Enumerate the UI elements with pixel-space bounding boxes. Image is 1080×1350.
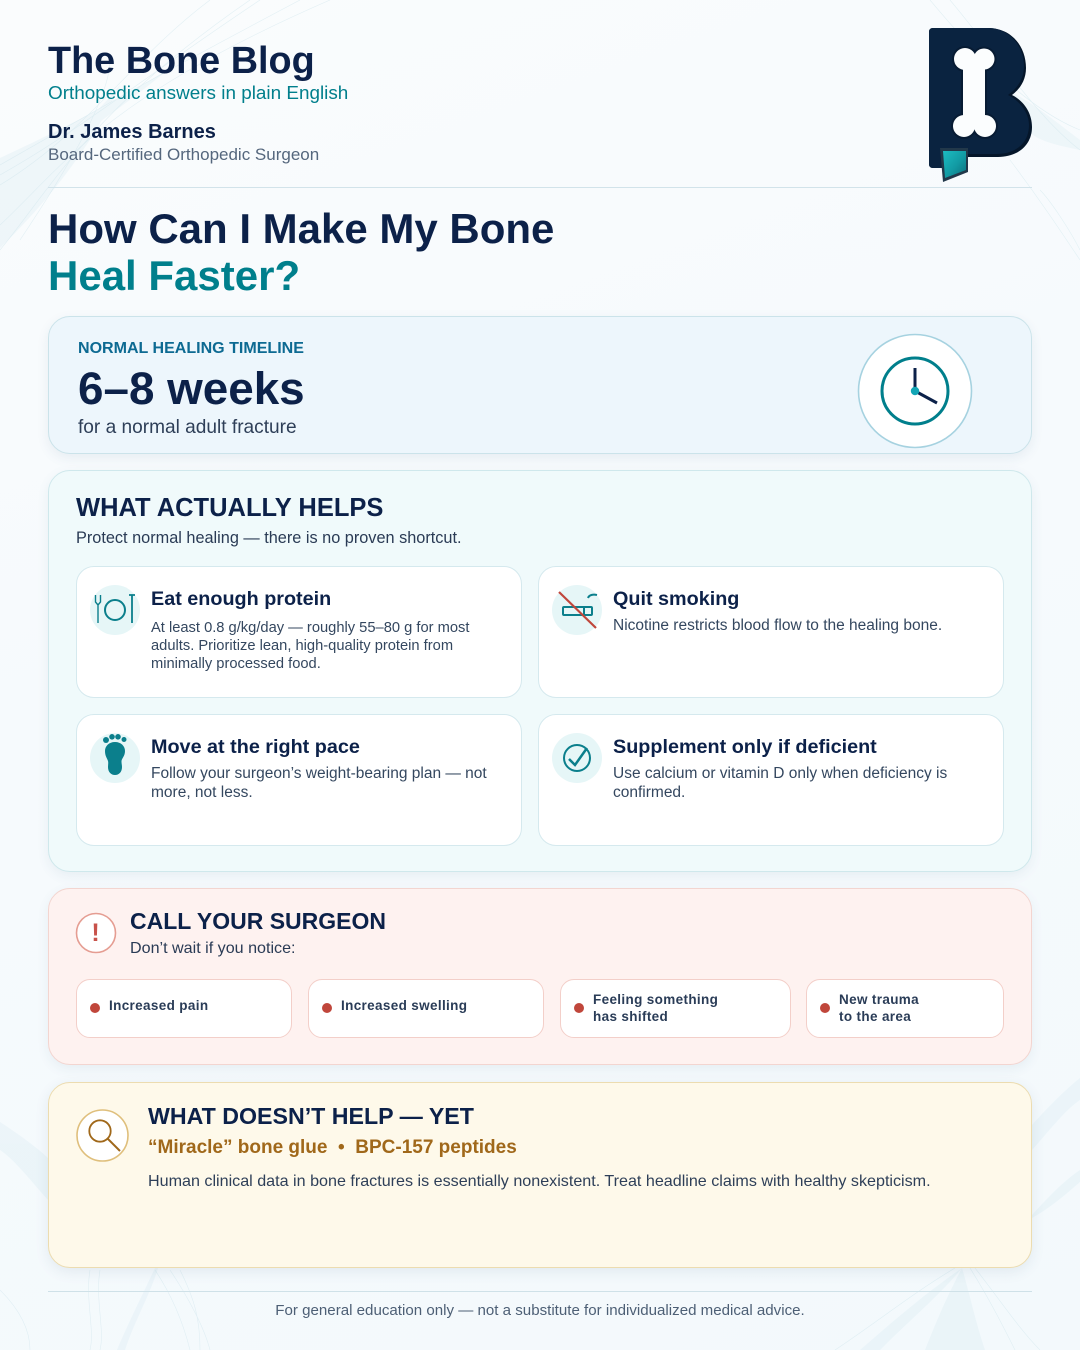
warning sign: increased pain: Increased pain [109,998,208,1013]
icon: plate and cutlery [90,585,140,635]
icon: clock [858,334,972,448]
icon: magnifying glass [76,1109,129,1162]
panel: call your surgeon [48,888,1032,1065]
card text [613,765,947,801]
panel: normal healing timeline [48,316,1032,454]
card text: more, not less. [151,784,253,801]
card text [151,620,470,672]
warning sign: feeling shift: has shifted [593,1009,668,1024]
icon: warning [76,912,116,954]
author name: Dr. James Barnes [48,121,216,143]
warning sign: new trauma [806,979,1004,1038]
card text: confirmed. [613,784,685,801]
card title: Quit smoking [613,588,739,610]
warning sign: feeling shift [560,979,791,1038]
warning sign: feeling shift: Feeling something [593,992,718,1007]
author credential: Board-Certified Orthopedic Surgeon [48,145,319,164]
card text: Follow your surgeon’s weight-bearing plan — not [151,765,487,782]
claims: “Miracle” bone glue • BPC-157 peptides [148,1137,517,1158]
timeline label: NORMAL HEALING TIMELINE [78,339,304,357]
card text: Use calcium or vitamin D only when deficiency is [613,765,947,782]
main heading: Heal Faster? [48,252,300,299]
warning sign: increased pain [76,979,292,1038]
icon: check circle [552,733,602,783]
timeline note: for a normal adult fracture [78,417,297,438]
footer divider [48,1291,1032,1292]
warning sign: increased swelling [308,979,544,1038]
icon: footprint [90,733,140,783]
panel: what actually helps [48,470,1032,872]
panel: what doesn't help yet [48,1082,1032,1268]
card: move [76,714,522,846]
card: protein [76,566,522,698]
card text: At least 0.8 g/kg/day — roughly 55–80 g for most [151,620,469,636]
surgeon heading: CALL YOUR SURGEON [130,908,386,934]
card title: Move at the right pace [151,736,360,758]
card: quit smoking [538,566,1004,698]
card text [151,765,487,801]
warning sign: new trauma: New trauma [839,992,919,1007]
header divider [48,187,1032,188]
card: supplement [538,714,1004,846]
explanation: Human clinical data in bone fractures is essentially nonexistent. Treat headline claims with healthy skepticism. [148,1172,931,1190]
icon: warning: ! [91,919,100,947]
card text: Nicotine restricts blood flow to the healing bone. [613,617,942,634]
section heading: WHAT ACTUALLY HELPS [76,494,383,522]
footer disclaimer: For general education only — not a substitute for individualized medical advice. [275,1302,805,1319]
tagline: Orthopedic answers in plain English [48,83,348,104]
card title: Eat enough protein [151,588,331,610]
section heading: WHAT DOESN’T HELP — YET [148,1103,474,1129]
blog title: The Bone Blog [48,40,315,82]
blog header [48,40,348,164]
warning sign: increased swelling: Increased swelling [341,998,467,1013]
card title: Supplement only if deficient [613,736,877,758]
main heading [48,205,554,299]
main heading: How Can I Make My Bone [48,205,554,252]
timeline value: 6–8 weeks [78,363,305,414]
card text: adults. Prioritize lean, high-quality protein from [151,638,453,654]
icon: bone B logo [929,28,1032,182]
card text: minimally processed food. [151,656,321,672]
warning sign: new trauma: to the area [839,1009,911,1024]
surgeon subheading: Don’t wait if you notice: [130,939,296,957]
icon: no smoking [552,585,602,635]
section subheading: Protect normal healing — there is no proven shortcut. [76,529,462,547]
